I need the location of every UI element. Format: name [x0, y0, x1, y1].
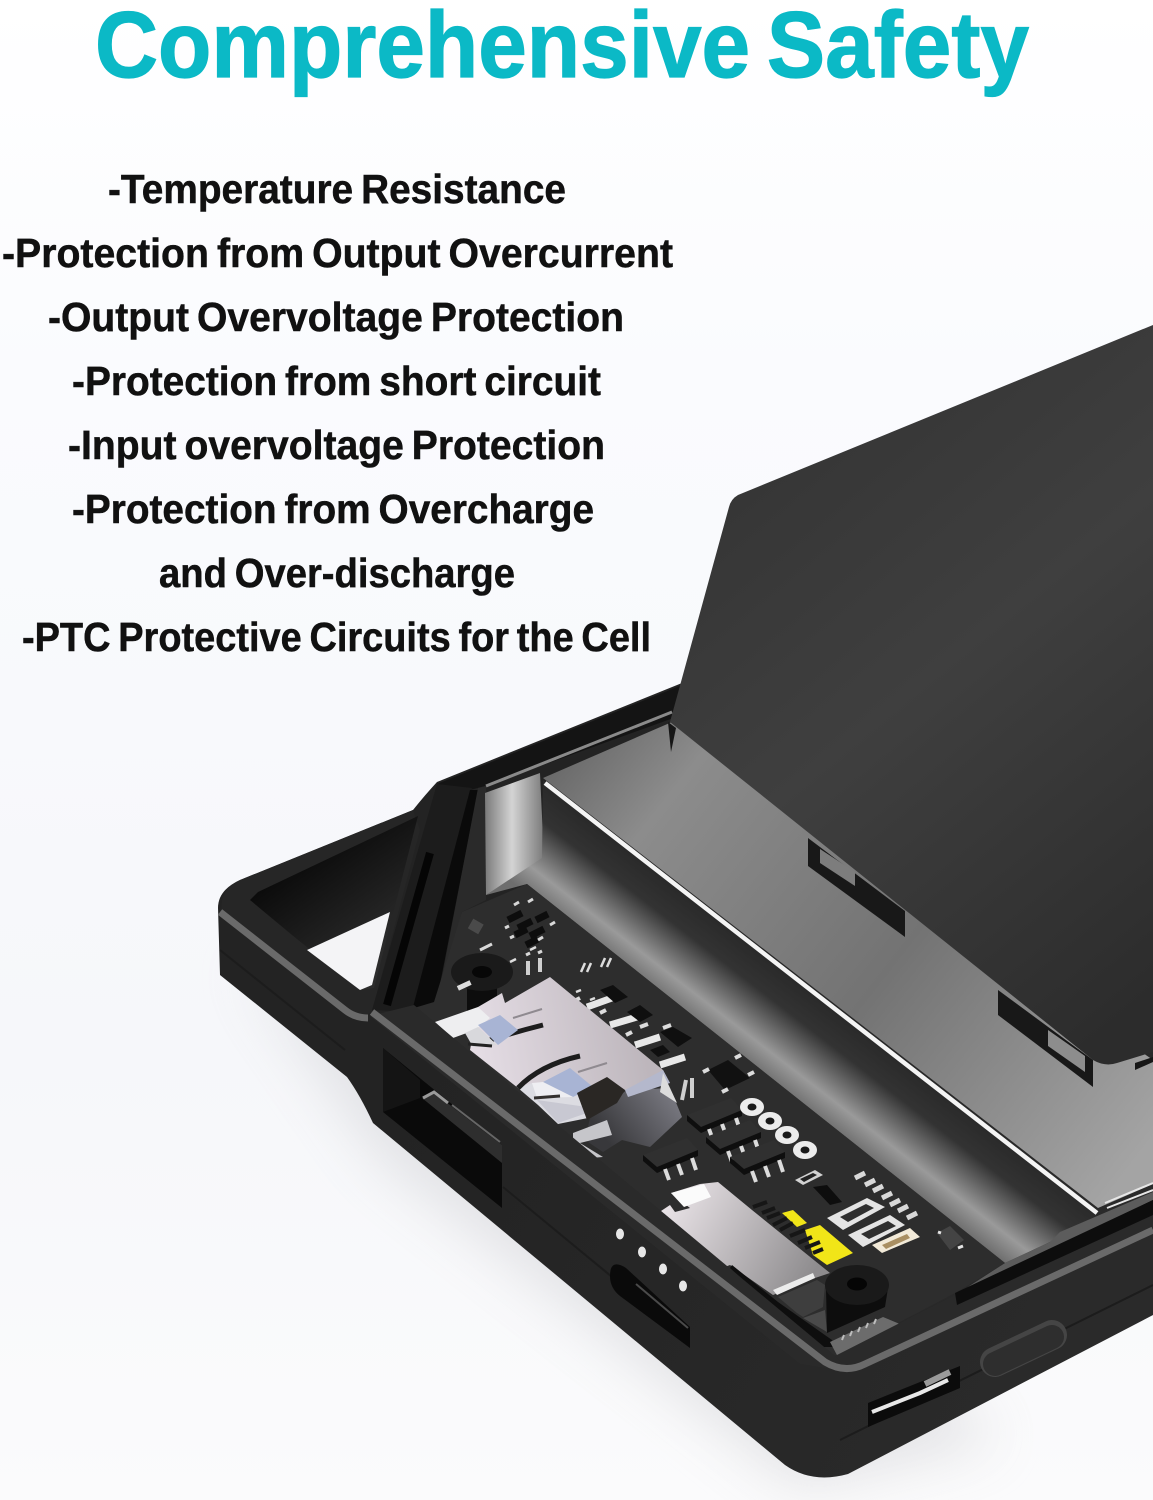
- black clip lower: [730, 1265, 835, 1347]
- curled foil: [465, 1027, 497, 1047]
- lid right tab: [1135, 1057, 1153, 1070]
- SOT chips: [643, 1098, 785, 1182]
- small white pads: [576, 998, 671, 1035]
- rear rim highlight: [486, 712, 672, 786]
- cut-through window: [307, 912, 390, 990]
- feature: input overvoltage: -Input overvoltage Protection: [68, 422, 605, 468]
- large side port: [383, 1048, 502, 1208]
- lid left tab: [668, 722, 676, 752]
- rim face front: [370, 1005, 850, 1372]
- black SMD parts: [600, 985, 628, 1003]
- clip window 2: [1048, 1030, 1085, 1072]
- white washers: [740, 1098, 817, 1159]
- case silhouette: [218, 683, 1153, 1477]
- silver lower strap: [537, 1100, 587, 1123]
- grey bevel strip: [220, 912, 1153, 1369]
- feature: over-discharge: and Over-discharge: [159, 550, 515, 596]
- shield white tab: [671, 1184, 711, 1207]
- right black channel: [955, 1200, 1153, 1305]
- power button: [995, 1335, 1052, 1364]
- port metal: [422, 1092, 502, 1163]
- feature: output overcurrent: -Protection from Output Overcurrent: [2, 230, 673, 276]
- right floor ledge: [957, 1192, 1153, 1294]
- connector pins: [842, 1319, 876, 1340]
- clip window 1: [820, 849, 855, 886]
- lid lower clip 1: [808, 838, 905, 937]
- metal behind lower clip: [778, 1280, 825, 1317]
- feature: PTC circuits: -PTC Protective Circuits for the Cell: [22, 614, 651, 660]
- shield edge: [773, 1273, 815, 1295]
- port side wall: [383, 1048, 420, 1112]
- dark clip: [577, 1077, 625, 1120]
- connector shade: [803, 1310, 827, 1332]
- USB-C port: [610, 1264, 690, 1348]
- circuit board: [414, 884, 1005, 1356]
- silver back wall: [485, 773, 544, 895]
- left cavity: [250, 816, 418, 990]
- strut grooves: [387, 853, 430, 1005]
- shield slots: [490, 1025, 580, 1088]
- battery end rails: [1105, 1183, 1153, 1208]
- silver strap: [625, 1070, 670, 1097]
- indicator LEDs: [616, 1228, 687, 1292]
- feature: output overvoltage: -Output Overvoltage Protection: [48, 294, 624, 340]
- crystals and flex: [827, 1198, 964, 1253]
- blue tabs: [478, 1015, 518, 1045]
- hinge strut: [372, 784, 472, 1012]
- wall below battery: [486, 780, 1097, 1263]
- small parts near washers: [703, 1055, 842, 1205]
- yellow pads: [782, 1210, 853, 1265]
- rear rim: [437, 685, 690, 790]
- micro USB port: [868, 1366, 960, 1427]
- silver pins: [528, 958, 692, 1100]
- feature: temperature: -Temperature Resistance: [108, 166, 566, 212]
- device shadow: [240, 960, 1000, 1490]
- left foil piece: [435, 1007, 490, 1038]
- strut inner band: [413, 790, 478, 1020]
- comb traces: [753, 1202, 823, 1253]
- bonding pads row: [855, 1173, 917, 1218]
- foil backing: [518, 1083, 588, 1124]
- lid lower clip 2: [998, 990, 1093, 1087]
- feature: overcharge: -Protection from Overcharge: [72, 486, 594, 532]
- lid panel: [668, 325, 1153, 1087]
- battery surface: [543, 722, 1153, 1208]
- shield corner: [660, 1073, 677, 1103]
- white bar components: [587, 998, 685, 1065]
- protection feature list: [2, 166, 673, 660]
- rim face right: [835, 1200, 1153, 1372]
- lower silver bracket: [573, 1120, 612, 1158]
- lower metal shield: [658, 1182, 830, 1295]
- connector body: [585, 1088, 682, 1152]
- grommet lower: [825, 1265, 889, 1333]
- grommet upper: [451, 953, 513, 1015]
- upper metal shield: [435, 977, 677, 1124]
- upper SMD cluster: [468, 899, 555, 955]
- device: power bank cutaway: [218, 325, 1153, 1490]
- shield embossed lines: [513, 1009, 607, 1072]
- black bar above board: [523, 1116, 628, 1198]
- left frame top face: [221, 810, 420, 1018]
- feature: short circuit: -Protection from short circuit: [72, 358, 601, 404]
- interior dark bay: [434, 786, 486, 1020]
- small resistors: [510, 947, 611, 1000]
- lower case seam: [220, 950, 1153, 1440]
- board edge connector: [830, 1317, 907, 1357]
- battery bright edge: [545, 783, 1097, 1213]
